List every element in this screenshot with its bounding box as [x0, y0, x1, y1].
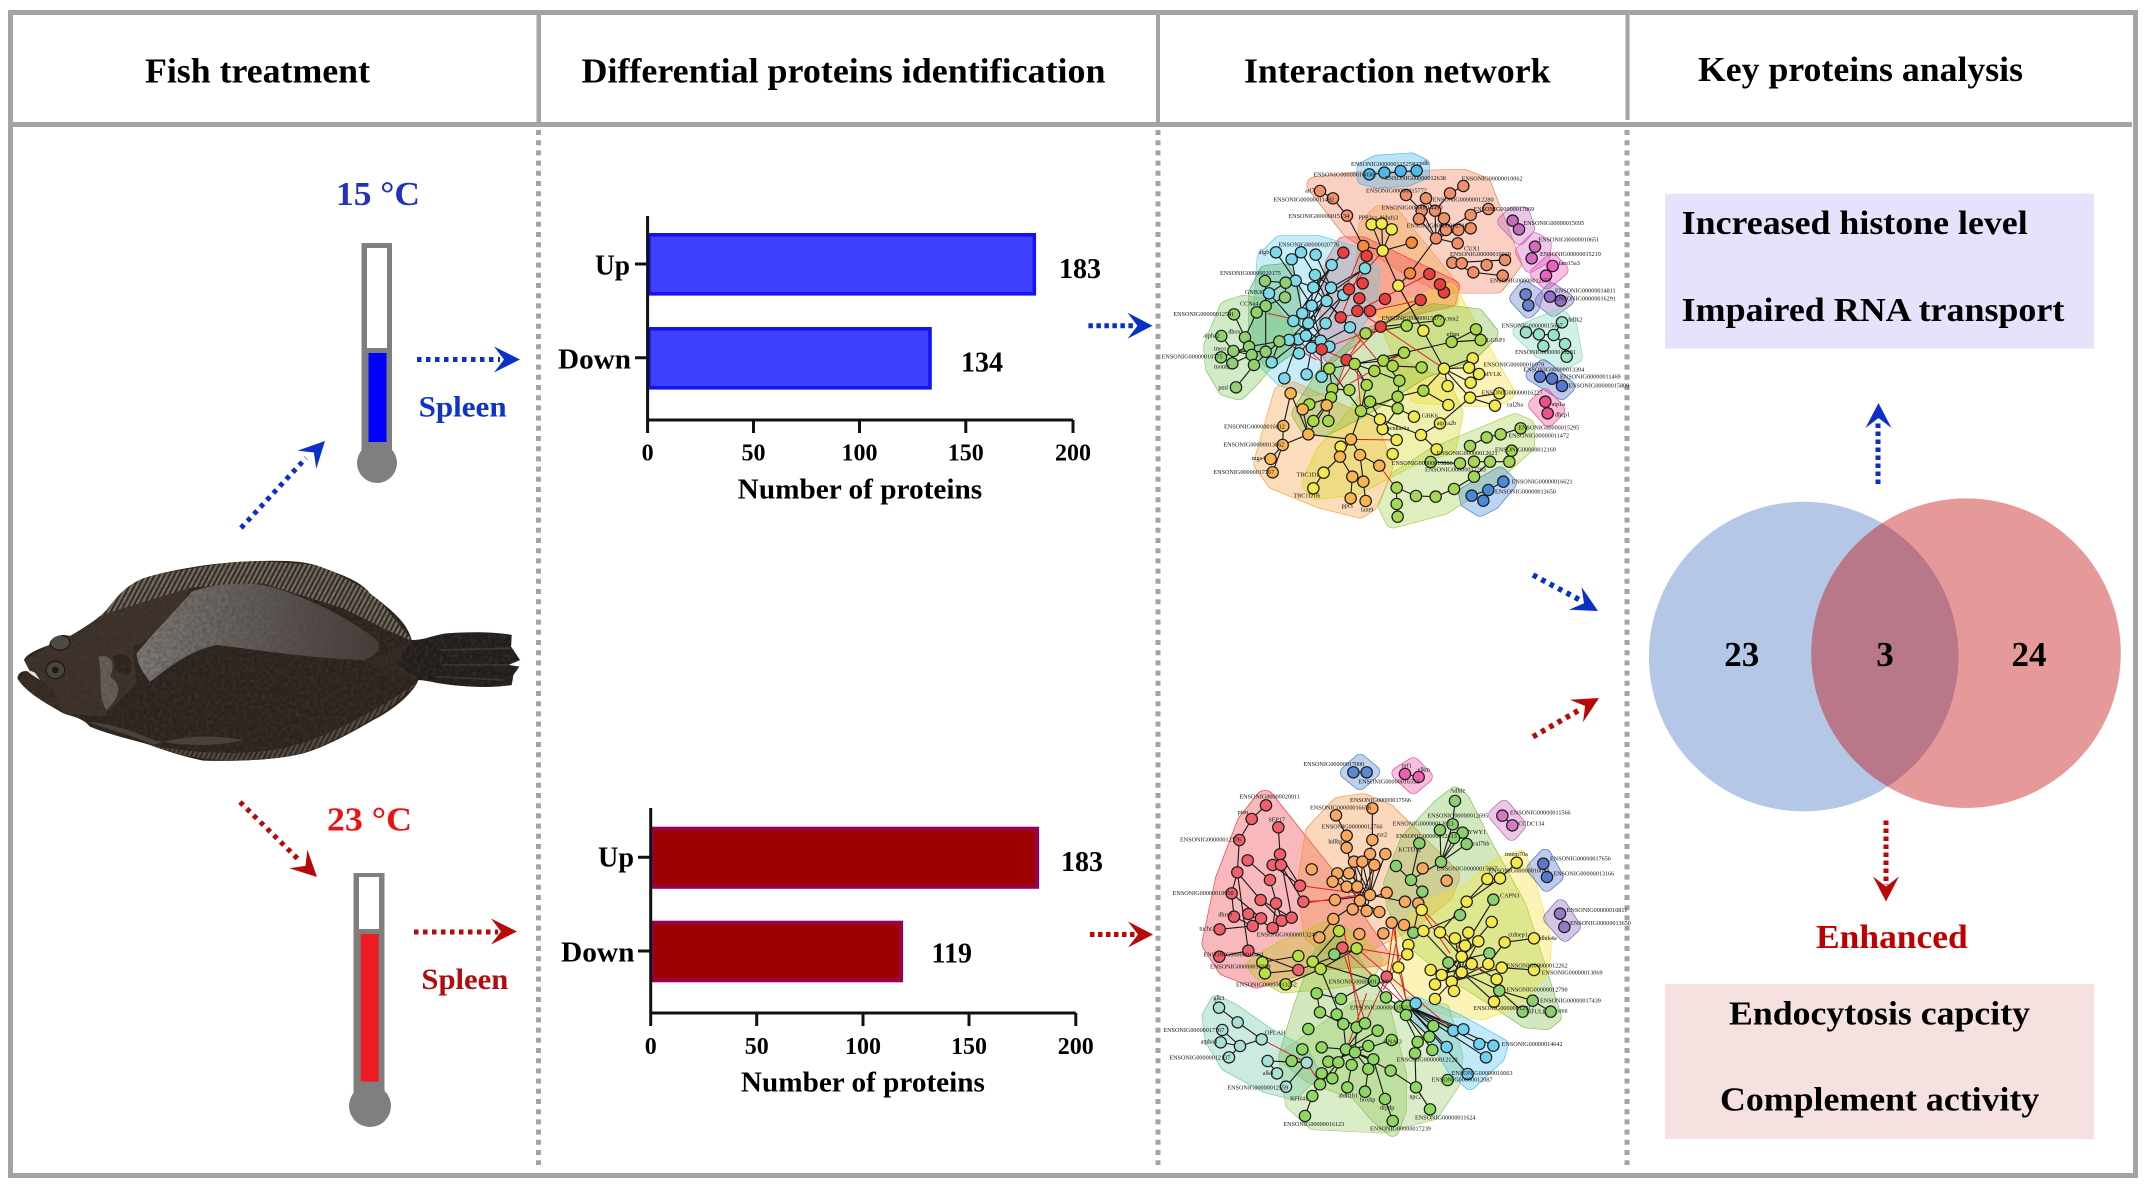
network node labels: ENSONIG00000013166	[1553, 871, 1614, 877]
box: warm results: Endocytosis capcity	[1729, 996, 2030, 1033]
network node labels: ENSONIG00000015219	[1540, 252, 1601, 258]
network: 23 C	[1163, 761, 1631, 1133]
network node labels: ENSONIG00000013247	[1257, 933, 1318, 939]
network: 15 C	[1162, 159, 1629, 522]
network node labels: ENSONIG00000020175	[1220, 271, 1281, 277]
network node labels: ENSONIG00000012695	[1427, 813, 1488, 819]
panel: key proteins analysis	[1533, 194, 2121, 1139]
network node labels: ENSONIG00000012280	[1433, 198, 1494, 204]
network node labels: ppcs	[1342, 503, 1354, 509]
network node labels: ENSONIG00000012263	[1425, 468, 1486, 474]
bar chart: 15 C: 100	[842, 441, 878, 467]
bar chart: 15 C: Up	[595, 249, 630, 281]
bar chart: 15 C: 0	[642, 441, 654, 467]
bar chart: 15 C: Down	[558, 343, 631, 375]
arrow: blue chart to network	[1088, 313, 1152, 339]
network node labels: ENSONIG00000017767	[1163, 1028, 1224, 1034]
network node labels: dhrs9	[1218, 913, 1232, 919]
network node labels: ptnl	[1218, 385, 1228, 391]
network node labels: LGRP1	[1487, 338, 1505, 344]
box: warm results	[1665, 984, 2094, 1139]
network node labels: ENSONIG00000012525	[1351, 162, 1412, 168]
venn diagram	[1649, 498, 2121, 811]
network node labels: hdlk2	[1568, 318, 1582, 324]
network node labels: atpha3	[1201, 1039, 1217, 1045]
network node labels: ENSONIG00000011566	[1510, 811, 1571, 817]
network node labels: ENSONIG00000016621	[1512, 479, 1573, 485]
network node labels: ENSONIG00000015809	[1568, 383, 1629, 389]
network node labels: ENSONIG00000014642	[1502, 1042, 1563, 1048]
heading: Differential proteins identification: Differential proteins identification	[582, 52, 1106, 91]
network node labels: arl7	[1305, 189, 1315, 195]
network node labels: ENSONIG00000012137	[1169, 1055, 1230, 1061]
network node labels: ENSONIG00000012169	[1495, 448, 1556, 454]
network node labels: ENSONIG00000013662	[1223, 443, 1284, 449]
fish photo	[17, 560, 520, 761]
network node labels: ENSONIG00000010775	[1162, 354, 1223, 360]
arrow: venn up	[1866, 403, 1892, 484]
network node labels: ENSONIG00000012790	[1507, 988, 1568, 994]
network node labels: ENSONIG00000017000	[1303, 762, 1364, 768]
network node labels: dhtk4a	[1540, 936, 1557, 942]
bar chart: 23 C: 0	[645, 1034, 657, 1060]
bar: Up 183	[649, 235, 1034, 294]
network node labels: elkm	[1418, 767, 1430, 773]
bar chart: 23 C: 150	[951, 1034, 987, 1060]
network node labels: ENSONIG00000012766	[1322, 825, 1383, 831]
network node labels: ENSONIG00000015067	[1437, 867, 1498, 873]
network node labels: YWY1	[1468, 830, 1486, 836]
network node labels: tuchr2	[1199, 927, 1215, 933]
label: Spleen red: Spleen	[421, 963, 509, 996]
network node labels: ENSONIG00000015623	[1350, 1005, 1411, 1011]
network node labels: ENSONIG00000016658	[1310, 805, 1371, 811]
arrow: fish to 23 C	[240, 802, 326, 886]
box: cold results: Impaired RNA transport	[1682, 292, 2065, 329]
network node labels: ENSONIG00000017869	[1473, 207, 1534, 213]
arrow: 23 C to spleen	[414, 918, 517, 944]
network node labels: CCNa4	[1240, 302, 1258, 308]
panel: fish treatment	[10, 176, 530, 1127]
network node labels: ezr2	[1377, 833, 1387, 839]
network node labels: TBC1D1	[1297, 473, 1319, 479]
network hulls	[1213, 159, 1576, 520]
network node labels: RFH41	[1290, 1097, 1308, 1103]
bar chart: 23 C: 50	[745, 1034, 769, 1060]
network node labels: drpdp	[1380, 1105, 1394, 1111]
heading: Interaction network: Interaction network	[1244, 52, 1551, 91]
network node labels: TBC1D1B	[1293, 493, 1320, 499]
network node labels: ENSONIG00000012541	[1173, 312, 1234, 318]
network node labels: ENSONIG00000015772	[1366, 188, 1427, 194]
network node labels: ENSONIG00000016812	[1224, 424, 1285, 430]
network node labels: GNB3C	[1245, 290, 1265, 296]
network edges	[1221, 171, 1567, 517]
network node labels: MYLK	[1483, 372, 1502, 378]
bar chart: 15 C	[558, 216, 1101, 505]
network node labels: ENSONIG00000012638	[1385, 176, 1446, 182]
network node labels: CUX1	[1464, 247, 1480, 253]
network node labels: atp1a2b	[1437, 421, 1456, 427]
bar chart: 15 C: 183	[1059, 254, 1101, 285]
network edges	[1219, 772, 1564, 1121]
network node labels: dlgb	[1258, 250, 1269, 256]
network hulls	[1208, 761, 1574, 1130]
network node labels: ENSONIG00000016123	[1283, 1122, 1344, 1128]
network node labels: ENSONIG00000011624	[1415, 1115, 1476, 1121]
network node labels: ENSONIG00000010950	[1173, 891, 1234, 897]
network node labels: tmco	[1214, 347, 1226, 353]
bar chart: 15 C: 134	[961, 348, 1003, 379]
network node labels: ENSONIG00000011472	[1508, 433, 1569, 439]
network node labels: CCDC134	[1518, 821, 1544, 827]
bar chart: 23 C: 200	[1058, 1034, 1094, 1060]
network node labels: fam15a3	[1558, 260, 1580, 267]
venn diagram: 24	[2012, 635, 2046, 674]
network node labels: fam9	[1361, 507, 1373, 514]
network node labels: ENSONIG00000012621	[1437, 451, 1498, 457]
network node labels: ENSONIG00000012717	[1473, 1006, 1534, 1012]
bar chart: 15 C: 50	[742, 441, 766, 467]
network node labels: hoxhp	[1360, 1098, 1375, 1104]
network node labels: alk4	[1263, 1071, 1273, 1077]
network node labels: ENSONIG00000016291	[1555, 297, 1616, 303]
network node labels: mga4	[1252, 456, 1265, 462]
bar chart: 23 C: 119	[932, 938, 972, 969]
bar chart: 23 C: Number of proteins	[741, 1067, 985, 1099]
network nodes	[1215, 165, 1572, 522]
bar chart: 23 C: 100	[845, 1034, 881, 1060]
network node labels: PPP2ca	[1358, 215, 1377, 221]
network node labels: cmn2	[1445, 317, 1459, 323]
network node labels: ENSONIG00000012741	[1407, 224, 1468, 230]
heading: Key proteins analysis: Key proteins analysis	[1698, 50, 2023, 89]
arrow: red chart to network	[1090, 922, 1153, 948]
thermometer: 23 C	[349, 873, 391, 1127]
network node labels: ENSONIG00000015295	[1518, 425, 1579, 431]
network node labels: ENSONIG00000016063	[1452, 1071, 1513, 1077]
label: Enhanced: Enhanced	[1816, 919, 1968, 956]
network node labels: ctdnep1	[1508, 933, 1528, 939]
network node labels: nrf1	[1402, 762, 1412, 769]
network node labels: ENSONIG00000014490	[1382, 205, 1443, 211]
network node labels: tmem70a	[1505, 852, 1528, 858]
network node labels: aldh1b1	[1338, 1093, 1358, 1099]
network node labels: ENSONIG00000016533	[1358, 779, 1419, 785]
arrow: fish to 15 C	[241, 432, 334, 528]
network node labels: ENSONIG00000012129	[1397, 1058, 1458, 1064]
network node labels: ENSONIG00000012262	[1507, 963, 1568, 969]
network node labels: ENSONIG00000012559	[1227, 1085, 1288, 1091]
network node labels: ENSONIG00000013650	[1570, 921, 1631, 927]
network node labels	[1162, 161, 1629, 514]
bar chart: 15 C: Number of proteins	[738, 473, 982, 505]
network node labels: ENSONIG00000010053	[1488, 868, 1549, 874]
network node labels: ENSONIG00000016227	[1482, 390, 1543, 396]
network node labels: ENSONIG00000010886	[1392, 461, 1453, 467]
network node labels: hdlbp	[1328, 839, 1342, 845]
network node labels: cul2ba	[1507, 403, 1523, 409]
network node labels: KCTD12	[1398, 847, 1421, 853]
network node labels: sccpdh	[1412, 161, 1429, 167]
network node labels: CAPN3	[1500, 894, 1519, 900]
network node labels: smn	[1557, 1009, 1568, 1015]
arrow: venn down	[1873, 820, 1899, 902]
network node labels: pcnkar1a	[1387, 426, 1409, 432]
heading: Fish treatment: Fish treatment	[145, 52, 370, 91]
network node labels: ENSONIG00000012480	[1328, 979, 1389, 985]
network node labels: NFULK	[1527, 1009, 1548, 1015]
venn diagram: 3	[1876, 635, 1894, 674]
network nodes	[1213, 767, 1570, 1127]
network node labels: ENSONIG00000015134	[1288, 214, 1349, 220]
venn diagram: 23	[1724, 635, 1759, 674]
network node labels: ENSONIG00000017239	[1370, 1127, 1431, 1133]
box: warm results: Complement activity	[1720, 1082, 2039, 1119]
network node labels: ENSONIG00000010062	[1462, 177, 1523, 183]
box: cold results: Increased histone level	[1682, 205, 2028, 242]
bar: Down 134	[649, 329, 930, 388]
network node labels: ENSONIG00000010651	[1538, 238, 1599, 244]
network node labels: cul7bb	[1473, 841, 1489, 847]
network node labels: motn2	[1214, 364, 1230, 370]
network node labels: ENSONIG00000016036	[1313, 172, 1374, 178]
network node labels: Ndufs3	[1380, 214, 1398, 221]
bar chart: 23 C: 183	[1061, 847, 1103, 878]
network node labels: ENSONIG00000017656	[1550, 857, 1611, 863]
network node labels: ENSONIG00000013304	[1523, 368, 1584, 374]
network node labels: ENSONIG00000010811	[1567, 908, 1627, 914]
network node labels: ENSONIG00000012655	[1490, 279, 1551, 285]
network node labels: GBK6	[1422, 413, 1438, 419]
network node labels: ENSONIG00000017566	[1350, 798, 1411, 804]
network node labels: ENSONIG00000011492	[1273, 198, 1334, 204]
bar chart: 23 C	[561, 808, 1103, 1099]
network node labels: ENSONIG00000012087	[1432, 1078, 1493, 1084]
network node labels: alpha2	[1203, 333, 1220, 339]
panel: differential proteins	[558, 216, 1153, 1099]
arrow: 15 C to spleen	[417, 346, 520, 372]
network node labels: ENSONIG00000011008	[1210, 964, 1271, 970]
network node labels: GNAI3	[1383, 1039, 1402, 1045]
label: Spleen blue: Spleen	[419, 390, 507, 424]
network node labels: ENSONIG00000011469	[1560, 374, 1621, 380]
network node labels: ENSONIG00000017767	[1213, 470, 1274, 476]
network node labels: ENSONIG00000013069	[1542, 970, 1603, 976]
network node labels: ENSONIG00000015695	[1523, 221, 1584, 227]
network node labels: ENSONIG00000015461	[1203, 953, 1264, 959]
arrow: red network to venn	[1533, 687, 1606, 737]
bar chart: 23 C: Up	[598, 842, 634, 874]
network node labels: ENSONIG00000016979	[1483, 363, 1544, 369]
network node labels: glk3	[1213, 996, 1224, 1002]
network node labels: ENSONIG00000012413	[1396, 834, 1457, 840]
network node labels: ENSONIG00000013650	[1495, 489, 1556, 495]
network node labels: pten	[1238, 810, 1248, 816]
network node labels: ENSONIG00000015281	[1515, 350, 1576, 356]
bar chart: 15 C: 200	[1055, 441, 1091, 467]
network node labels: npc2	[1409, 1095, 1421, 1101]
label: 23 C: 23 °C	[327, 802, 412, 839]
network node labels: ENSONIG00000015077	[1382, 316, 1443, 322]
network node labels: ENSONIG00000010029	[1450, 252, 1511, 258]
bar chart: 23 C: Down	[561, 937, 634, 969]
network node labels: ENSONIG00000014811	[1555, 289, 1616, 295]
network node labels: SEP17	[1268, 817, 1285, 823]
network node labels: eftgn	[1447, 331, 1459, 338]
bar: Up 183	[652, 828, 1037, 887]
label: 15 C: 15 °C	[336, 176, 420, 213]
thermometer: 15 C	[357, 243, 397, 483]
network node labels: ENSONIG00000020011	[1239, 795, 1300, 801]
network node labels: ENSONIG00000013252	[1236, 983, 1297, 989]
network node labels: ENSONIG00000020776	[1278, 243, 1339, 249]
network node labels: dbox	[1228, 329, 1241, 335]
network node labels: dhcp1	[1555, 413, 1570, 419]
network node labels: OPLAH	[1265, 1031, 1286, 1037]
network node labels: atp1a	[1552, 402, 1565, 408]
network node labels	[1163, 762, 1631, 1133]
arrow: blue network to venn	[1533, 575, 1604, 622]
network node labels: ENSONIG00000015607	[1502, 323, 1563, 329]
box: cold results	[1665, 194, 2094, 349]
bar chart: 15 C: 150	[948, 441, 984, 467]
network node labels: ENSONIG00000012176	[1180, 837, 1241, 843]
bar: Down 119	[652, 922, 901, 980]
network node labels: Adhfe	[1450, 788, 1466, 795]
network node labels: ENSONIG00000017439	[1540, 999, 1601, 1005]
network node labels: ENSONIG00000012613	[1393, 821, 1454, 827]
